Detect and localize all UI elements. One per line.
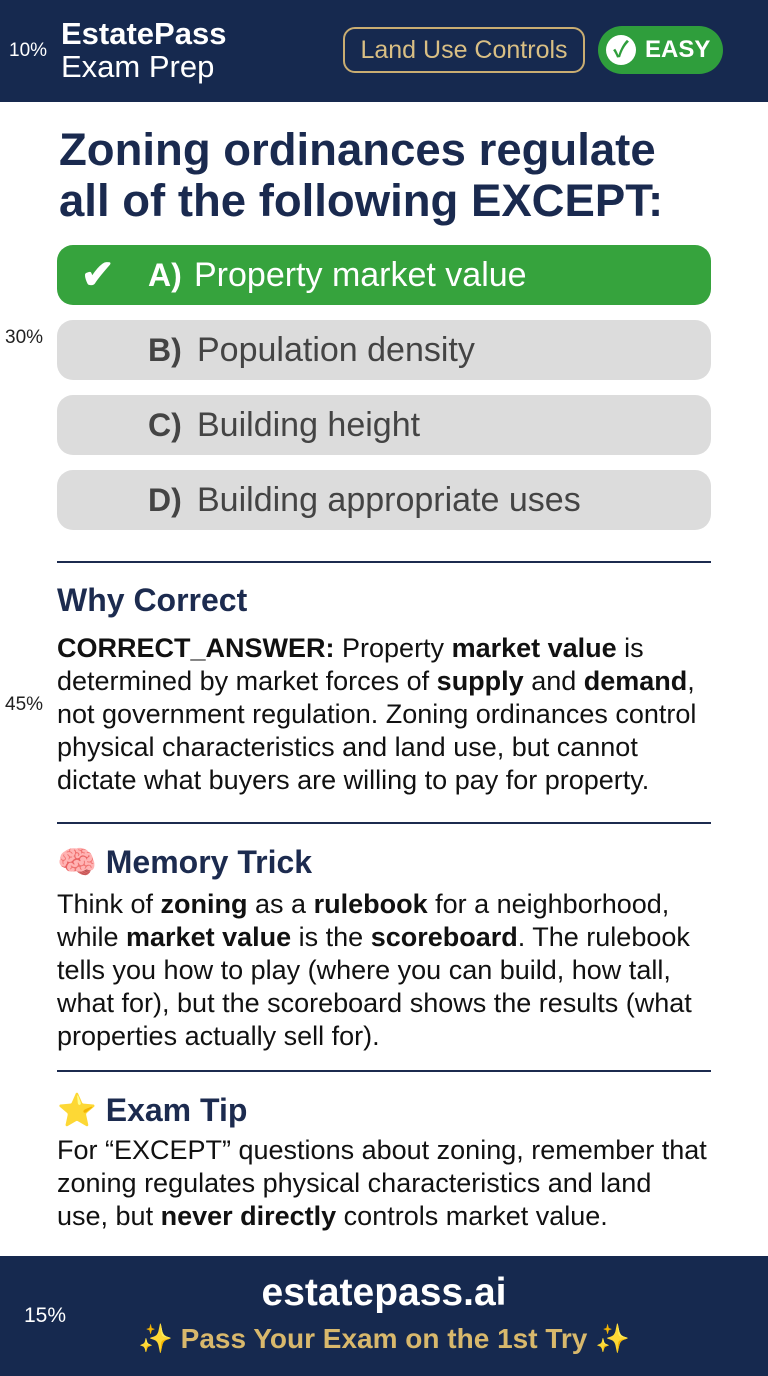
difficulty badge (598, 26, 723, 74)
label 10%: 10% (9, 40, 47, 61)
title (59, 124, 663, 226)
option B (57, 320, 711, 380)
explanation text: physical characteristics and land use, but cannot (57, 732, 638, 762)
heading exam tip: ⭐ Exam Tip (57, 1092, 247, 1128)
label 15%: 15% (24, 1304, 66, 1327)
option C: Building height (197, 406, 420, 444)
option A correct: Property market value (194, 256, 527, 294)
tip text: use, but never directly controls market value. (57, 1201, 608, 1231)
label 45%: 45% (5, 694, 43, 715)
option A correct (57, 245, 711, 305)
explanation text (57, 633, 696, 795)
explanation text: CORRECT_ANSWER: Property market value is (57, 633, 644, 663)
category badge: Land Use Controls (360, 36, 568, 64)
explanation text: not government regulation. Zoning ordinances control (57, 699, 696, 729)
option A correct: A) (148, 257, 182, 293)
header bar (0, 0, 768, 102)
footer site: estatepass.ai (262, 1271, 506, 1314)
option C (57, 395, 711, 455)
memory text: what for), but the scoreboard shows the results (what (57, 988, 692, 1018)
memory text: properties actually sell for). (57, 1021, 380, 1051)
brand (61, 16, 226, 84)
tip text: zoning regulates physical characteristics and land (57, 1168, 651, 1198)
option D: Building appropriate uses (197, 481, 581, 519)
footer bar (0, 1256, 768, 1376)
difficulty badge: EASY (645, 36, 710, 63)
brand: EstatePass (61, 16, 226, 51)
category badge (343, 27, 585, 73)
option D (57, 470, 711, 530)
option B: Population density (197, 331, 475, 369)
heading memory trick: 🧠 Memory Trick (57, 844, 312, 880)
title: all of the following EXCEPT: (59, 175, 663, 226)
memory text: while market value is the scoreboard. The rulebook (57, 922, 690, 952)
label 30%: 30% (5, 327, 43, 348)
memory text: tells you how to play (where you can build, how tall, (57, 955, 671, 985)
icon: check circle (606, 35, 636, 65)
tip text (57, 1135, 707, 1231)
heading why correct: Why Correct (57, 582, 247, 618)
option D: D) (148, 482, 182, 518)
option B: B) (148, 332, 182, 368)
brand: Exam Prep (61, 49, 214, 84)
memory text: Think of zoning as a rulebook for a neighborhood, (57, 889, 669, 919)
option C: C) (148, 407, 182, 443)
title: Zoning ordinances regulate (59, 124, 656, 175)
explanation text: dictate what buyers are willing to pay for property. (57, 765, 649, 795)
tip text: For “EXCEPT” questions about zoning, remember that (57, 1135, 707, 1165)
footer slogan: ✨ Pass Your Exam on the 1st Try ✨ (138, 1323, 630, 1354)
icon: check circle: ✓ (613, 37, 629, 62)
memory text (57, 889, 692, 1051)
option A correct: ✔ (81, 253, 115, 297)
explanation text: determined by market forces of supply and demand, (57, 666, 695, 696)
